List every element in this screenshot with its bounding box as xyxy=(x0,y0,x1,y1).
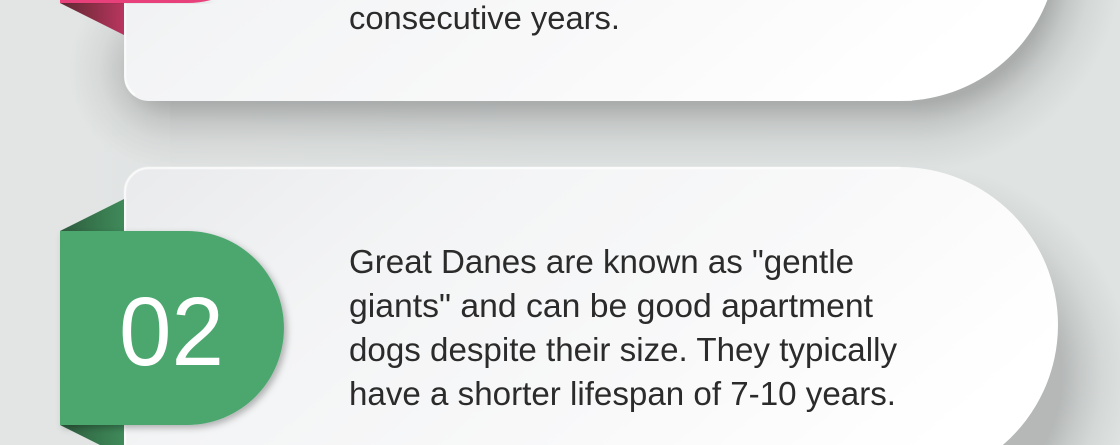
text: card 2 description: have a shorter lifespan of 7-10 years. xyxy=(349,375,896,412)
shadow: card 1 xyxy=(49,0,1120,203)
text: card 2 description: Great Danes are known as "gentle xyxy=(349,243,854,280)
text: card 2 description: giants" and can be good apartment xyxy=(349,287,873,324)
number tab: pink xyxy=(60,0,211,3)
text: card 2 description: dogs despite their size. They typically xyxy=(349,331,898,368)
shadow: card 2 xyxy=(912,105,1120,445)
ribbon fold: green top xyxy=(60,199,124,231)
number 02: 02 xyxy=(119,277,224,386)
text: card 2 description xyxy=(349,243,898,412)
text: card 1 last line: consecutive years. xyxy=(349,0,620,36)
panel: card 2 xyxy=(124,167,1058,445)
ribbon fold: green bottom xyxy=(60,425,124,445)
ribbon fold: pink xyxy=(60,3,124,35)
number tab: green xyxy=(60,231,284,425)
panel: card 1 xyxy=(124,0,1047,101)
